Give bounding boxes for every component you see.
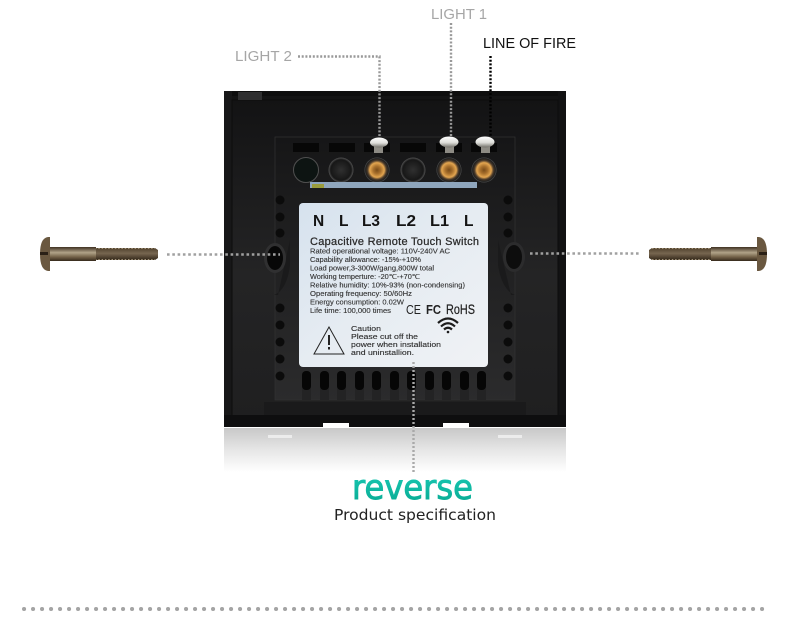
specification label (299, 203, 488, 367)
reflection under switch (224, 428, 566, 472)
ratings list (310, 248, 465, 315)
ratings list: Capability allowance: -15%-+10% (310, 257, 421, 264)
icon: wifi (438, 318, 458, 333)
terminal names: L1 (430, 213, 449, 230)
terminal names: L (339, 213, 348, 230)
dotted leader: light 2 (298, 56, 380, 136)
caution text: and uninstallion. (351, 348, 414, 357)
ratings list: Load power,3-300W/gang,800W total (310, 266, 434, 272)
switch back body (224, 91, 566, 428)
certification marks: RoHS (446, 301, 475, 317)
label: line of fire: LINE OF FIRE (483, 35, 576, 52)
ventilation slots (302, 371, 486, 400)
subheading: Product specification (334, 506, 496, 524)
ratings list: Relative humidity: 10%-93% (non-condensing) (310, 282, 465, 290)
terminal screws (370, 136, 494, 153)
ratings list: Operating frequency: 50/60Hz (310, 291, 413, 298)
terminal names: L3 (362, 213, 380, 230)
icon: warning triangle (314, 327, 344, 354)
dotted leader: light 1 (450, 23, 452, 136)
caution text: Caution (351, 324, 381, 333)
heading: reverse: reverse (352, 468, 473, 508)
dotted leader: line of fire (489, 56, 492, 136)
dotted leader: left screw (167, 253, 280, 256)
certification marks: CE (406, 302, 421, 317)
label: light 1: LIGHT 1 (431, 6, 487, 23)
certification marks (406, 301, 475, 317)
terminal names (313, 213, 473, 230)
ratings list: Rated operational voltage: 110V-240V AC (310, 248, 450, 256)
terminal names: L2 (396, 213, 416, 230)
side screw slots (264, 240, 525, 295)
caution text: Please cut off the (351, 332, 418, 341)
dotted footer divider (24, 607, 764, 611)
ratings list: Working temperture: -20℃-+70℃ (310, 274, 420, 281)
caution text (351, 324, 441, 357)
terminal names: N (313, 213, 324, 230)
mounting holes (276, 196, 512, 380)
bottom tabs (323, 423, 469, 428)
ratings list: Life time: 100,000 times (310, 308, 392, 315)
caution text: power when installation (351, 340, 441, 349)
terminal block (293, 143, 497, 182)
certification marks: FC (426, 302, 442, 317)
right screw (649, 237, 767, 271)
left screw (40, 237, 158, 271)
ratings list: Energy consumption: 0.02W (310, 300, 405, 306)
dotted leader: right screw (530, 252, 640, 255)
label: light 2: LIGHT 2 (235, 48, 292, 65)
dotted leader: reverse (412, 362, 415, 474)
warning sticker strip (310, 182, 477, 188)
terminal names: L (464, 213, 473, 230)
product name: Capacitive Remote Touch Switch (310, 236, 479, 248)
